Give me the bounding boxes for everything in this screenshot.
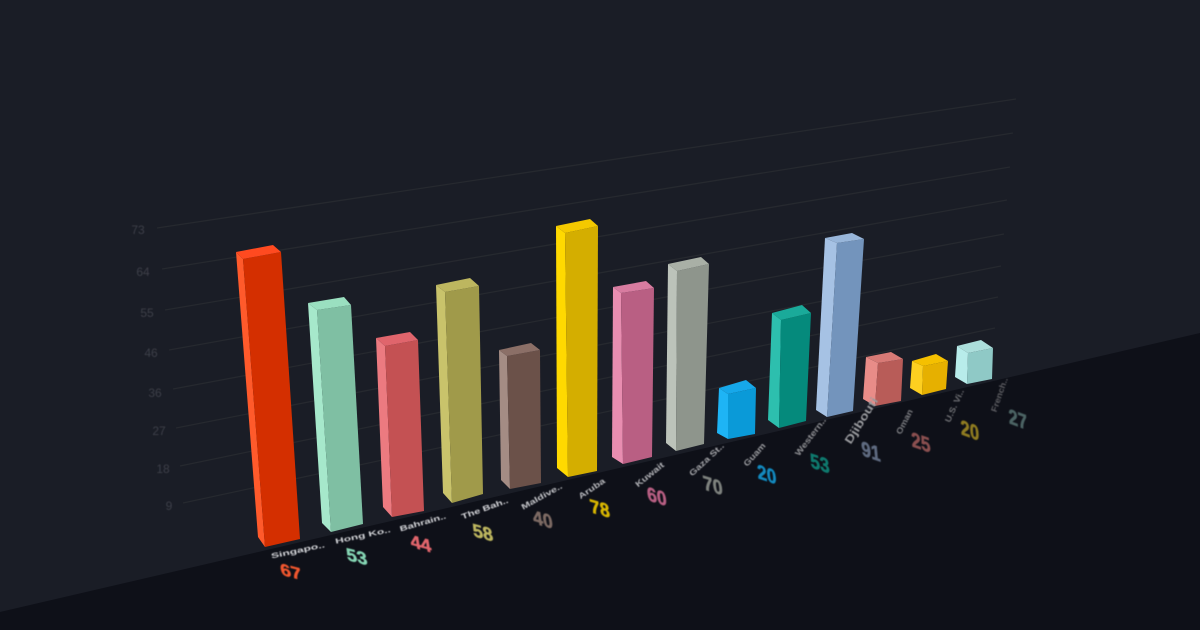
y-axis labels: 18 [156, 462, 170, 476]
category labels: Gaza St.. [687, 441, 726, 478]
value labels: 53 [809, 449, 831, 479]
value labels: 60 [646, 484, 668, 511]
bar: Kuwait [612, 281, 654, 464]
y-axis labels [131, 223, 173, 513]
category labels: Oman [894, 408, 915, 436]
y-axis labels: 36 [148, 386, 162, 400]
category labels: Kuwait [633, 459, 667, 489]
value labels: 78 [589, 496, 611, 523]
y-axis labels: 9 [166, 499, 173, 513]
y-axis labels: 27 [152, 424, 166, 438]
bar: pale teal [955, 340, 993, 384]
y-axis labels: 46 [144, 346, 158, 360]
category labels: Singapo.. [270, 541, 326, 561]
category labels: Bahrain.. [399, 512, 447, 534]
value labels: 44 [409, 531, 433, 557]
category labels: French.. [989, 376, 1010, 413]
bar: Guam [717, 380, 756, 439]
y-axis labels: 73 [131, 223, 145, 237]
bar: The Bahamas [436, 278, 483, 503]
y-axis labels: 64 [136, 265, 150, 279]
bar: Singapore [236, 245, 300, 547]
category labels: Aruba [577, 476, 607, 501]
value labels: 27 [1008, 405, 1028, 435]
category labels: U.S. Vi.. [943, 388, 966, 424]
bar: Oman-side red [863, 352, 903, 406]
bar: Bahrain [376, 332, 424, 517]
bar: Maldives [499, 343, 541, 489]
value labels: 67 [279, 559, 303, 584]
value labels: 58 [471, 519, 494, 546]
value labels: 40 [532, 507, 554, 534]
category labels: Western.. [793, 416, 828, 458]
bar: Djibouti-side blue [816, 233, 864, 417]
floor plane [0, 333, 1200, 630]
value labels: 53 [345, 544, 369, 569]
category labels: Maldive.. [519, 481, 564, 511]
category labels [270, 376, 1010, 561]
value labels: 70 [702, 472, 724, 501]
bar: Gaza Strip [666, 257, 709, 451]
bar: gold [910, 354, 948, 395]
bar: Western Sahara [768, 305, 811, 428]
category labels: Guam [742, 441, 767, 468]
value labels: 91 [860, 437, 882, 467]
category labels: Djibouti [842, 395, 881, 446]
category labels: The Bah.. [460, 496, 510, 522]
bar: Aruba [556, 219, 598, 477]
value labels: 20 [756, 461, 778, 490]
bar: Hong Kong [308, 297, 363, 532]
y-axis labels: 55 [140, 306, 154, 320]
value labels: 20 [960, 416, 980, 446]
value labels [279, 405, 1028, 584]
value labels: 25 [910, 428, 931, 458]
category labels: Hong Ko.. [335, 526, 392, 546]
